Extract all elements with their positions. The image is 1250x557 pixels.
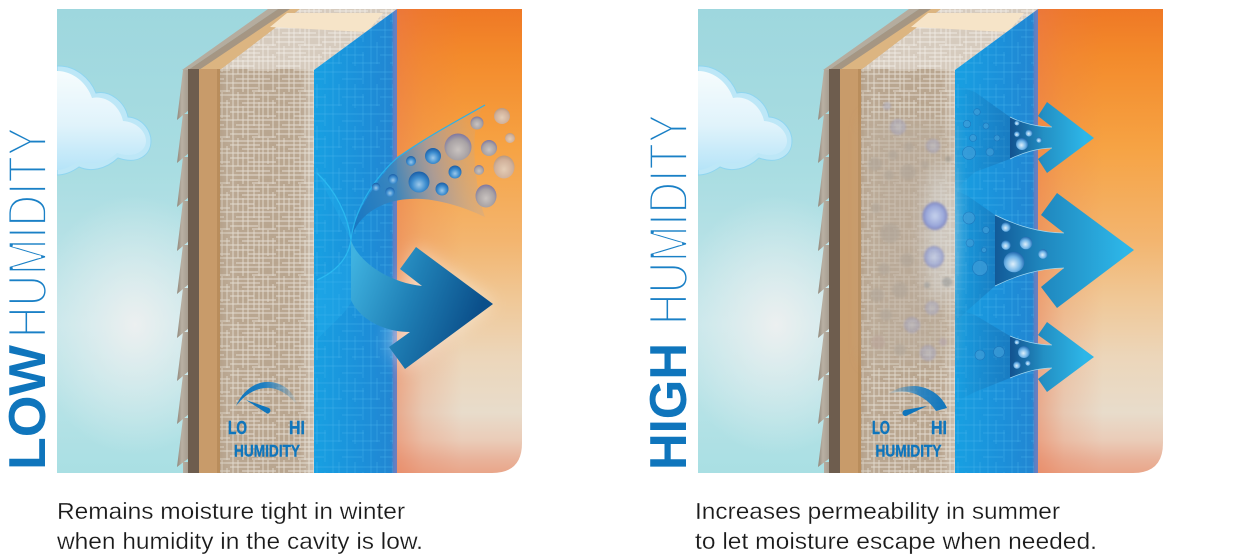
arrow head xyxy=(351,240,493,369)
caption high xyxy=(695,498,1097,554)
sky background xyxy=(57,9,317,473)
arrow: middle xyxy=(995,193,1134,308)
caption high: Increases permeability in summer xyxy=(695,498,1060,524)
title: high humidity xyxy=(636,114,699,470)
moisture haze in insulation xyxy=(868,102,956,361)
humidity gauge low: HI xyxy=(289,418,305,438)
blue membrane xyxy=(955,9,1038,473)
title: high humidity: HIGH xyxy=(640,343,698,470)
wall illustration scene xyxy=(35,9,523,473)
humidity gauge low xyxy=(228,382,305,460)
humidity gauge high: LO xyxy=(872,418,890,438)
wall top face xyxy=(182,9,397,70)
cloud xyxy=(698,66,792,175)
humidity gauge high: HI xyxy=(931,418,947,438)
title: low humidity: LOW xyxy=(0,344,57,470)
caption low xyxy=(56,498,423,554)
moisture cones on membrane xyxy=(955,85,1010,402)
siding xyxy=(177,70,189,473)
sheathing layers xyxy=(829,69,861,473)
caption low: Remains moisture tight in winter xyxy=(57,498,405,524)
sheathing layers xyxy=(188,69,220,473)
sky background xyxy=(698,9,958,473)
cloud xyxy=(57,66,151,175)
arrow: bottom xyxy=(1010,322,1094,392)
orange sky background xyxy=(1038,9,1164,473)
swoosh band xyxy=(351,105,485,240)
panel: low humidity xyxy=(0,9,523,554)
water droplets xyxy=(372,108,515,208)
caption high: to let moisture escape when needed. xyxy=(695,528,1097,554)
humidity gauge high: HUMIDITY xyxy=(876,442,942,460)
faded droplets on membrane xyxy=(962,109,1004,360)
arrow: top xyxy=(1010,102,1094,173)
panel: high humidity xyxy=(636,9,1164,554)
caption low: when humidity in the cavity is low. xyxy=(56,528,423,554)
insulation burlap xyxy=(220,69,314,473)
blue membrane xyxy=(314,9,397,473)
title: high humidity: HUMIDITY xyxy=(636,114,699,325)
curved deflection arrow xyxy=(317,105,493,369)
wall illustration scene xyxy=(676,9,1164,473)
insulation burlap xyxy=(861,69,955,473)
humidity gauge low: HUMIDITY xyxy=(234,442,301,460)
humidity gauge low: LO xyxy=(228,418,247,438)
title: low humidity xyxy=(0,127,58,470)
orange sky background xyxy=(397,9,523,473)
humidity gauge high xyxy=(872,386,947,460)
siding xyxy=(818,70,830,473)
wall top face xyxy=(823,9,1038,70)
arrow glow xyxy=(389,247,493,369)
